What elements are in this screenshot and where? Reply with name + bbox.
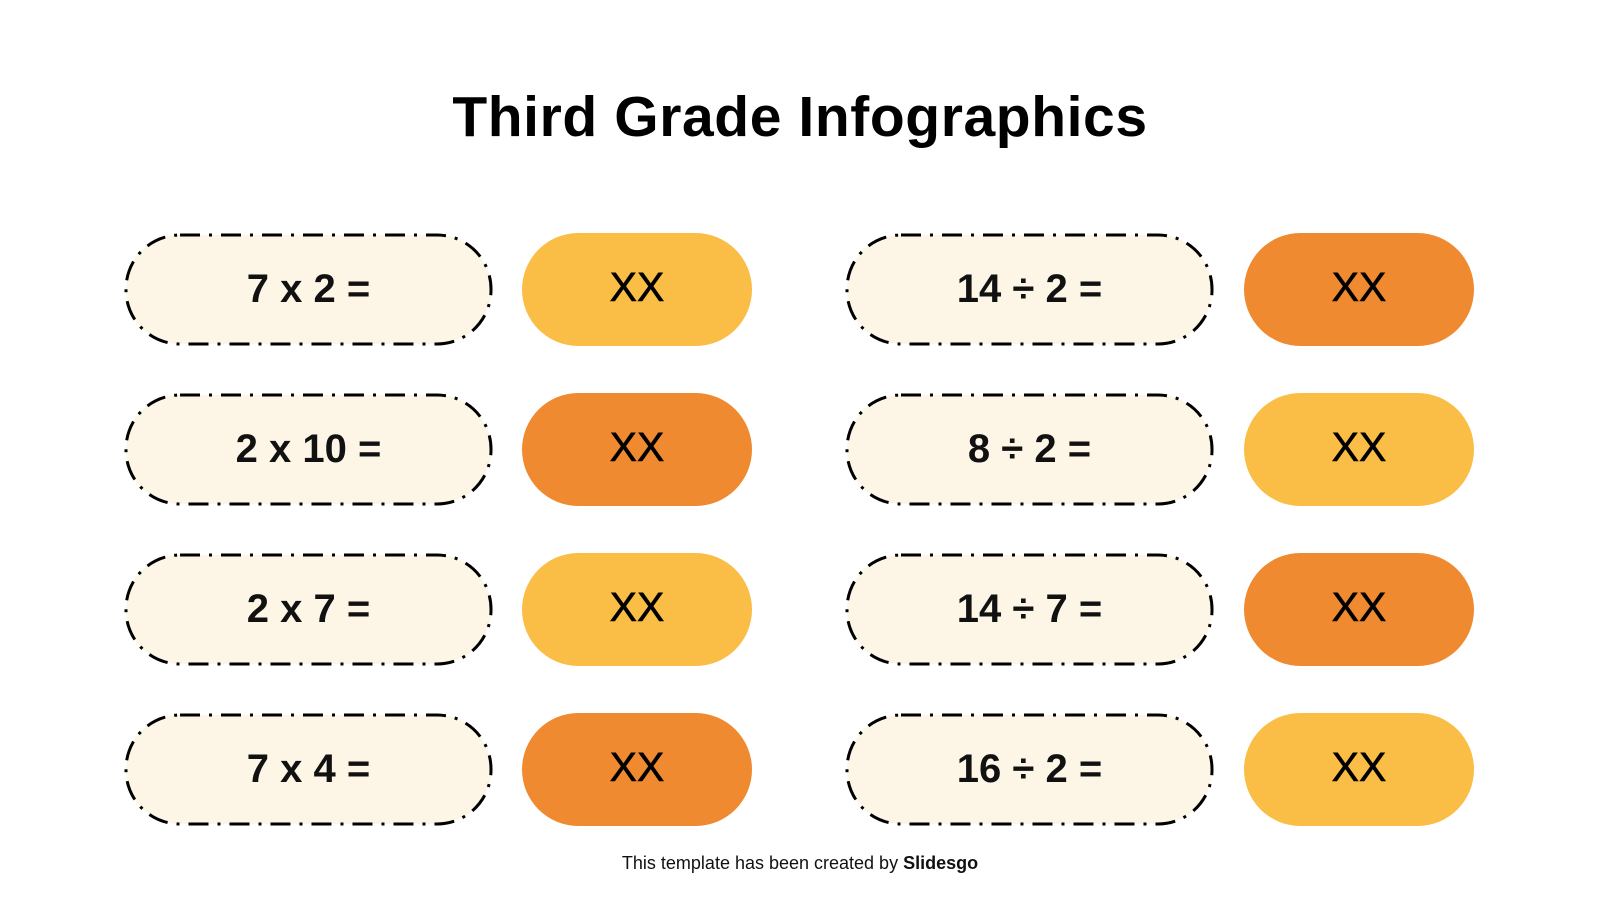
answer 3 — [522, 553, 752, 666]
title: Third Grade Infographics — [452, 85, 1148, 149]
answer 1 — [522, 233, 752, 346]
answer 7: XX — [1332, 584, 1386, 630]
answer 8: XX — [1332, 744, 1386, 790]
answer 5 — [1244, 233, 1474, 346]
equation: 16 ÷ 2: 16 ÷ 2 = — [957, 747, 1102, 791]
equation: 2 x 7 — [124, 554, 492, 666]
equation: 2 x 10 — [124, 394, 492, 506]
equation: 8 ÷ 2: 8 ÷ 2 = — [968, 427, 1091, 471]
equation: 14 ÷ 2 — [846, 234, 1214, 346]
equation: 14 ÷ 2: 14 ÷ 2 = — [957, 267, 1102, 311]
answer 8 — [1244, 713, 1474, 826]
equation: 7 x 4: 7 x 4 = — [247, 747, 370, 791]
answer 2 — [522, 393, 752, 506]
equation: 16 ÷ 2 — [846, 714, 1214, 826]
answer 1: XX — [610, 264, 664, 310]
answer 2: XX — [610, 424, 664, 470]
equation: 7 x 2 — [124, 234, 492, 346]
equation: 7 x 2: 7 x 2 = — [247, 267, 370, 311]
equation: 14 ÷ 7 — [846, 554, 1214, 666]
footer credit: This template has been created by Slidesgo — [622, 853, 978, 873]
answer 7 — [1244, 553, 1474, 666]
answer 6: XX — [1332, 424, 1386, 470]
answer 4 — [522, 713, 752, 826]
equation: 2 x 7: 2 x 7 = — [247, 587, 370, 631]
answer 6 — [1244, 393, 1474, 506]
answer 4: XX — [610, 744, 664, 790]
equation: 2 x 10: 2 x 10 = — [236, 427, 381, 471]
equation: 7 x 4 — [124, 714, 492, 826]
answer 5: XX — [1332, 264, 1386, 310]
equation: 14 ÷ 7: 14 ÷ 7 = — [957, 587, 1102, 631]
equation: 8 ÷ 2 — [846, 394, 1214, 506]
answer 3: XX — [610, 584, 664, 630]
